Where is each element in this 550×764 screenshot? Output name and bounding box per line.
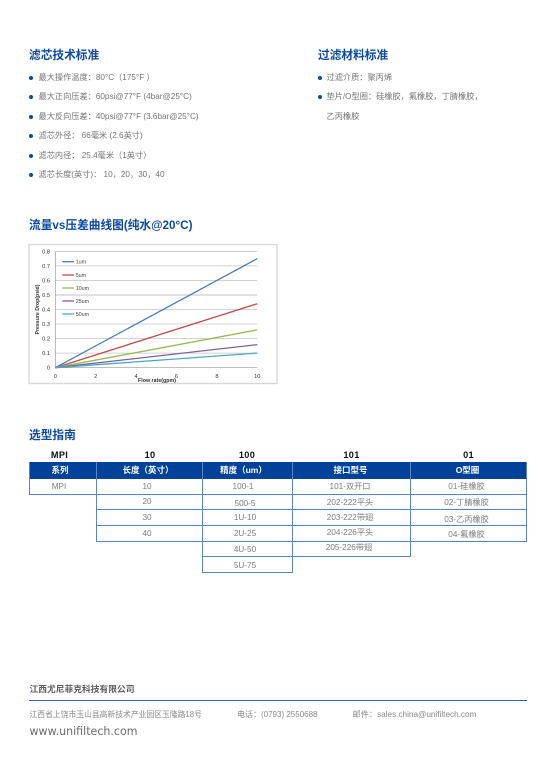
header row: 接口型号 (333, 465, 368, 475)
code labels row: MPI (51, 450, 68, 460)
footer rule (29, 700, 526, 701)
column: length: 30 (142, 513, 152, 522)
table rules (29, 462, 527, 573)
header row (29, 462, 527, 479)
series lines (55, 259, 257, 368)
column: connector type: 203-222带翅 (327, 513, 373, 522)
column: series: MPI (52, 482, 66, 491)
column: precision: 100-1 (233, 482, 253, 491)
bullet item: max temperature: 最大操作温度：80°C（175°F ） (38, 72, 155, 82)
header row: 系列 (51, 465, 68, 475)
x axis labels: 6 (175, 374, 178, 380)
column: precision: 1U-10 (234, 513, 256, 522)
legend (62, 260, 90, 318)
header row: 精度（um） (220, 465, 267, 475)
column: connector type (326, 482, 373, 552)
code labels row (51, 450, 474, 460)
bullet item: max forward pressure: 最大正向压差：60psi@77°F (4bar@25°C) (38, 92, 192, 101)
column: length: 20 (142, 497, 152, 506)
column: O-ring: 02-丁腈橡胶 (444, 498, 489, 507)
column: precision: 5U-75 (234, 561, 256, 570)
column: O-ring: 04-氟橡胶 (448, 530, 485, 539)
y axis labels: 0.6 (42, 278, 50, 284)
phone: 电话：(0793) 2550688 (237, 710, 318, 719)
y axis labels: 0.8 (42, 249, 50, 255)
line chart: flow vs pressure drop (28, 244, 278, 384)
heading: technical standards: 滤芯技术标准 (29, 49, 99, 62)
column: precision (233, 482, 256, 570)
bullet item: outer diameter: 滤芯外径： 66毫米 (2.6英寸) (38, 131, 143, 140)
y axis labels (42, 249, 50, 372)
column: length (142, 482, 152, 538)
y axis labels: 0.4 (42, 308, 50, 314)
x axis labels: 10 (254, 374, 260, 380)
column: O-ring: 01-硅橡胶 (448, 482, 485, 491)
column: O-ring: 03-乙丙橡胶 (444, 515, 489, 524)
company name: 江西尤尼菲克科技有限公司 (30, 684, 134, 694)
bullet item: gasket and O-ring: 垫片/O型圈：硅橡胶，氟橡胶，丁腈橡胶， (326, 92, 483, 101)
column: connector type: 202-222平头 (327, 498, 373, 507)
column: connector type: 205-226带翅 (326, 543, 372, 552)
line chart: flow vs pressure drop: Pressure Drop(psid) (35, 284, 41, 334)
text: EPDM continuation: 乙丙橡胶 (326, 112, 359, 120)
x axis labels: 2 (94, 374, 97, 380)
code labels row: 100 (239, 450, 255, 460)
bullet item: filter media: 过滤介质：聚丙烯 (326, 72, 392, 82)
column: connector type: 101-双开口 (330, 482, 370, 491)
legend: 5um (76, 273, 87, 279)
bullet item: inner diameter: 滤芯内径： 25.4毫米（1英寸） (38, 150, 151, 160)
y axis labels: 0.3 (42, 322, 50, 328)
bullet item: cartridge length: 滤芯长度(英寸)： 10，20，30，40 (38, 170, 165, 179)
code labels row: 101 (343, 450, 360, 460)
column: connector type: 204-226平头 (327, 528, 373, 537)
x axis labels (54, 374, 260, 380)
footer (29, 684, 527, 738)
header row: O型圈 (456, 465, 479, 475)
bullet item: max reverse pressure: 最大反向压差：40psi@77°F (3.6bar@25°C) (38, 112, 199, 120)
y axis labels: 0.2 (42, 337, 50, 343)
header row: 长度（英寸） (122, 465, 174, 475)
axis titles: Flow rate(gpm) (138, 378, 176, 384)
y axis labels: 0.5 (42, 293, 50, 299)
legend: 10um (76, 286, 90, 292)
y axis labels: 0.1 (42, 351, 50, 357)
y axis labels: 0.7 (42, 264, 50, 270)
column: precision: 4U-50 (234, 545, 256, 554)
heading: material standards: 过滤材料标准 (318, 49, 388, 62)
legend: 25um (76, 299, 90, 305)
code labels row: 10 (145, 450, 155, 460)
panel: filter cartridge technical standards (29, 48, 199, 179)
address: 江西省上饶市玉山县高新技术产业园区玉隆路18号 (30, 710, 202, 719)
legend: 50um (76, 312, 90, 318)
code labels row: 01 (463, 450, 474, 460)
heading: selection guide: 选型指南 (29, 429, 76, 442)
column: length: 10 (142, 482, 152, 491)
email: 邮件：sales.china@unifiltech.com (352, 710, 476, 719)
panel: filter material standards (318, 48, 483, 120)
column: precision: 500-5 (235, 499, 255, 508)
x axis labels: 8 (215, 374, 218, 380)
column: O-ring (444, 482, 489, 539)
x axis labels: 4 (135, 374, 138, 380)
x axis labels: 0 (54, 374, 57, 380)
website: www.unifiltech.com (30, 725, 138, 738)
y axis labels: 0 (47, 366, 50, 372)
column: length: 40 (142, 529, 152, 538)
column: precision: 2U-25 (234, 529, 256, 538)
legend: 1um (76, 260, 87, 266)
heading: flow vs pressure chart: 流量vs压差曲线图(纯水@20°C) (29, 218, 192, 232)
